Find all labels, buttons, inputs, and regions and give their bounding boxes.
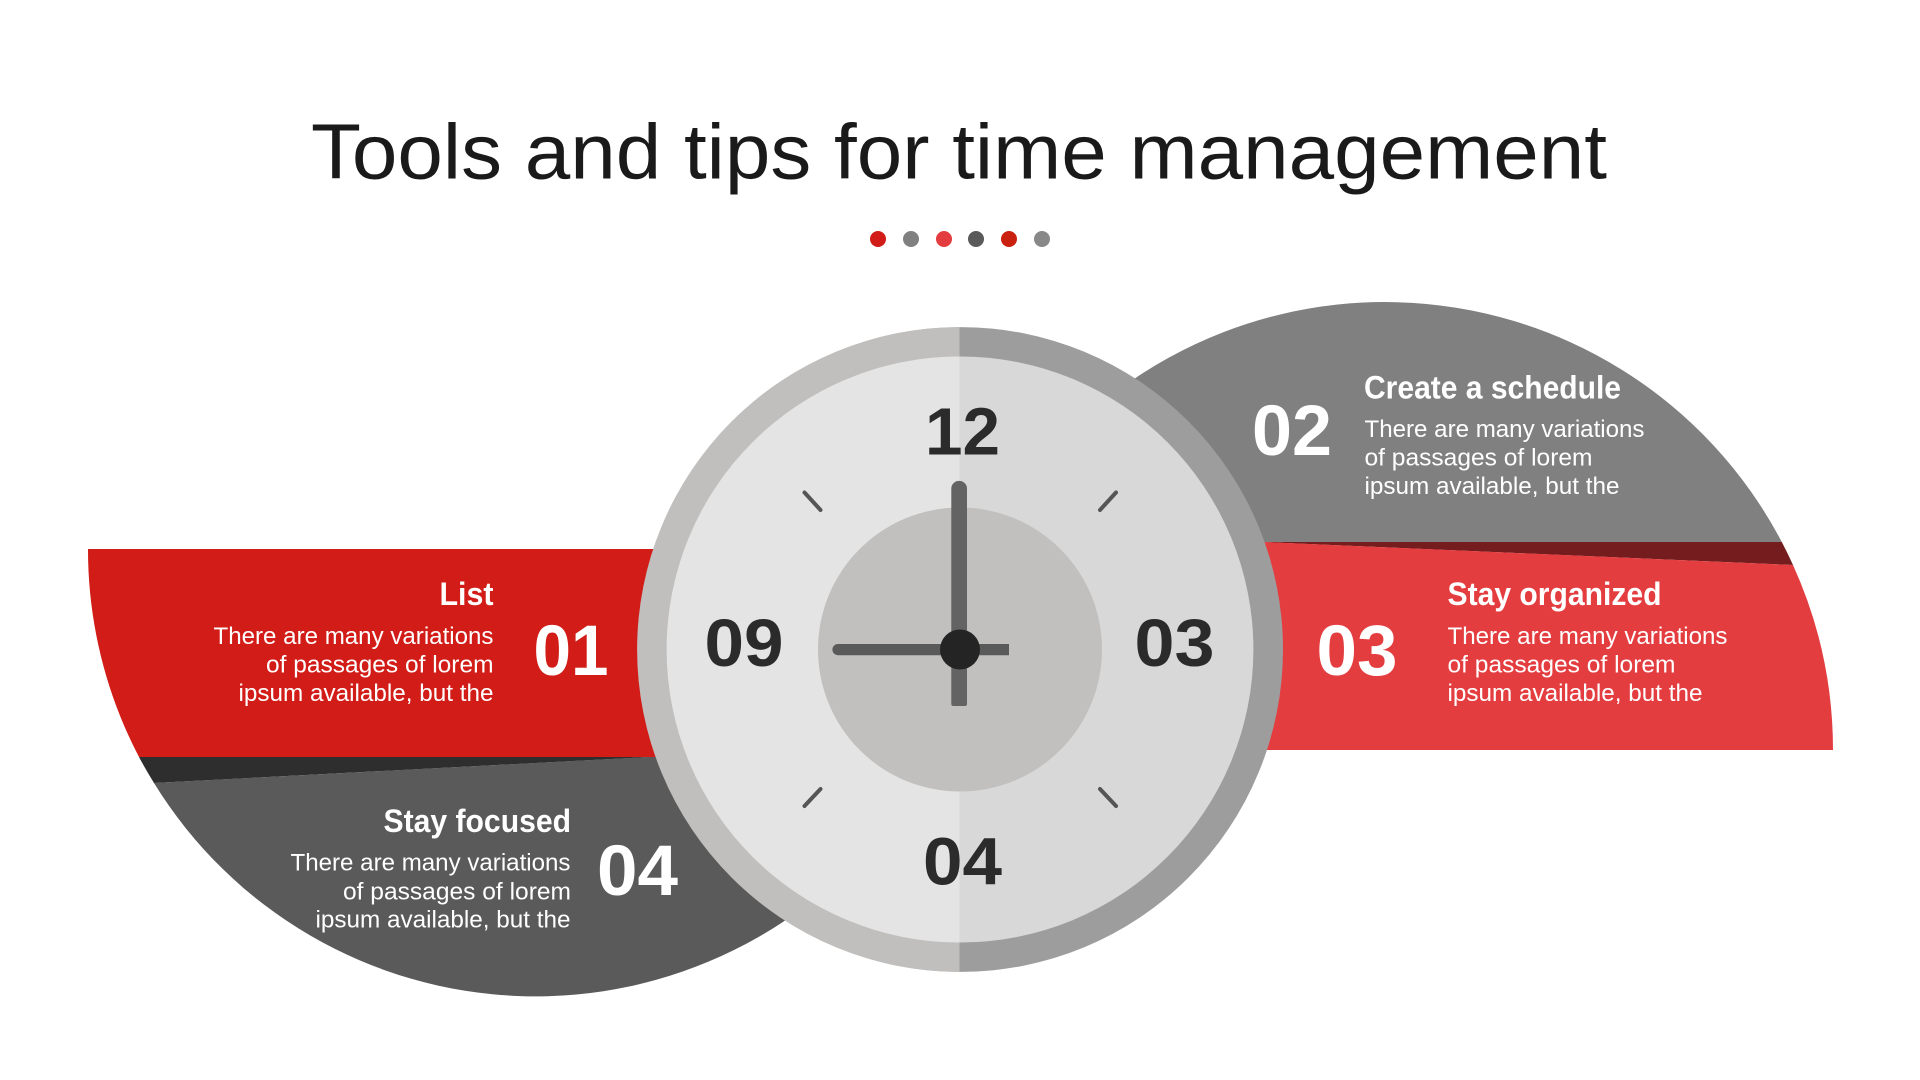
clock centre pin (940, 630, 980, 670)
clock hand: hour (832, 644, 1009, 655)
text block: Stay organized description: of passages of lorem (1448, 652, 1676, 679)
heading: Stay focused: Stay focused (384, 803, 571, 839)
clock inner disc (818, 508, 1102, 792)
text block: Stay focused description (290, 850, 571, 934)
heading: Create a schedule: Create a schedule (1364, 369, 1621, 405)
number: 01: 01 (534, 612, 608, 691)
panel: 04 Stay focused (154, 757, 900, 996)
text block: Create a schedule description: ipsum available, but the (1364, 473, 1620, 500)
clock outer ring (637, 327, 1283, 972)
panel: 01 List (88, 549, 700, 757)
text block: List description: ipsum available, but the (238, 680, 494, 707)
title: Tools and tips for time management (311, 108, 1607, 196)
text block: Create a schedule description: of passages of lorem (1364, 445, 1592, 472)
clock number 03: 03 (1134, 606, 1214, 681)
fold: dark band between 01 and 04 (139, 757, 650, 783)
clock number 04: 04 (923, 824, 1002, 900)
text block: List description (214, 623, 494, 707)
text block: Create a schedule description: There are many variations (1364, 416, 1644, 443)
clock tick marks (804, 492, 1116, 806)
heading: List: List (440, 576, 494, 612)
text block: Stay organized description: There are many variations (1448, 623, 1728, 650)
text block: Stay focused description: of passages of lorem (343, 878, 571, 905)
text block: Stay organized description: ipsum available, but the (1448, 680, 1702, 707)
clock face (667, 356, 1253, 942)
clock number 12: 12 (925, 394, 1000, 470)
decorative dot row (870, 231, 1050, 247)
text block: List description: of passages of lorem (266, 652, 494, 679)
clock number 09: 09 (704, 606, 784, 681)
text block: Stay focused description: ipsum available, but the (316, 907, 570, 934)
number: 04: 04 (597, 832, 679, 911)
text block: Create a schedule description (1364, 416, 1644, 500)
text block: Stay focused description: There are many variations (290, 850, 570, 877)
heading: Stay organized: Stay organized (1448, 576, 1662, 612)
panel: 02 Create a schedule (1000, 302, 1782, 542)
number: 03: 03 (1316, 612, 1398, 691)
text block: List description: There are many variations (214, 623, 494, 650)
panel: 03 Stay organized (1200, 542, 1833, 750)
number: 02: 02 (1252, 392, 1332, 471)
clock hand: minute (951, 481, 967, 706)
text block: Stay organized description (1448, 623, 1728, 707)
fold: dark red band between 02 and 03 (1262, 542, 1793, 565)
clock (637, 327, 1283, 972)
